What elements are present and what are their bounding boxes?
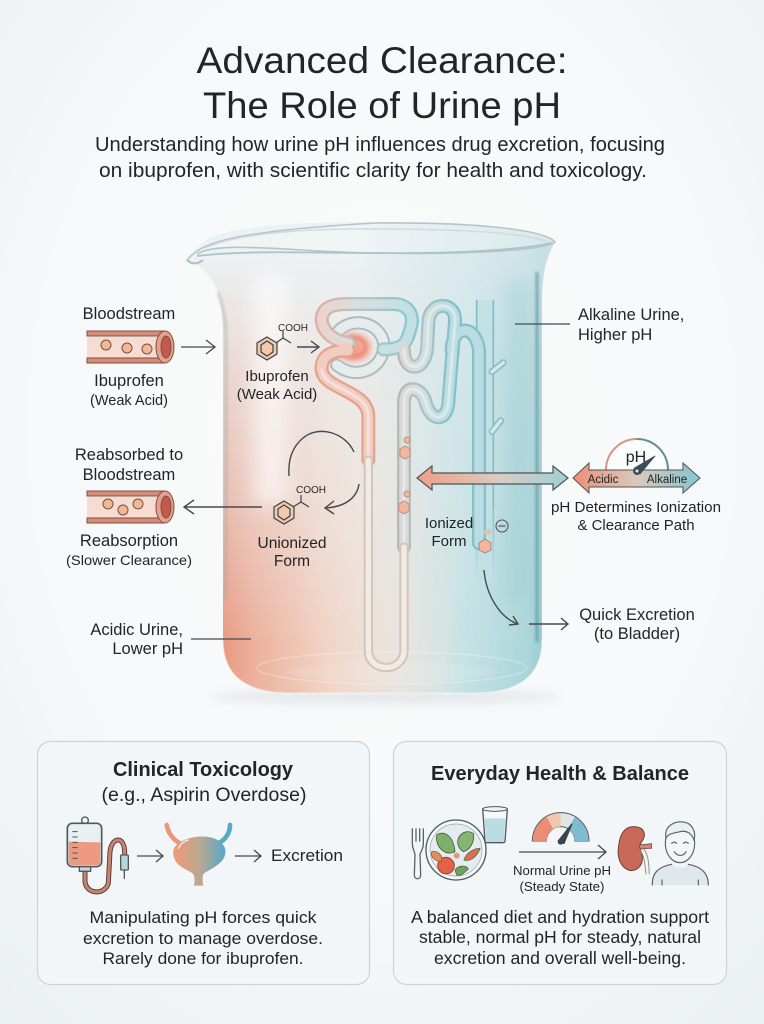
- label: acidic urine: Acidic Urine,: [90, 621, 183, 639]
- label: alkaline urine: Higher pH: [578, 326, 652, 344]
- collecting duct: [477, 300, 503, 583]
- body text: Manipulating pH forces quick: [90, 908, 317, 927]
- body text: [83, 908, 323, 968]
- arrow: to reabsorption: [184, 500, 262, 514]
- title: The Role of Urine pH: [203, 85, 561, 126]
- icon: smiling person: [652, 822, 708, 885]
- label: ibuprofen: Ibuprofen: [94, 372, 164, 390]
- label: acidic urine: Lower pH: [112, 640, 183, 658]
- label: unionized form: Unionized: [258, 535, 326, 552]
- body text: excretion and overall well-being.: [434, 948, 686, 968]
- arrow: bladder to excretion: [235, 850, 261, 862]
- icon: bladder: [167, 825, 230, 886]
- label: pH determines ionization: & Clearance Path: [578, 517, 694, 534]
- arrow: bloodstream to beaker: [181, 340, 215, 354]
- body text: [411, 907, 709, 968]
- icon: blood vessel reabsorption: [87, 491, 174, 523]
- pH gauge arrow: Alkaline: [647, 474, 687, 486]
- ionized particle: [479, 520, 508, 553]
- label: ibuprofen inside beaker: [237, 368, 317, 403]
- unionized molecule: COOH: [296, 485, 326, 496]
- reabsorption vessel group: Bloodstream: [83, 466, 175, 484]
- pH gauge arrow: pH: [626, 449, 646, 466]
- label: unionized form: [258, 535, 326, 570]
- icon: kidney: [618, 827, 652, 874]
- body text: A balanced diet and hydration support: [411, 907, 709, 927]
- label: pH determines ionization: pH Determines Ionization: [551, 499, 721, 516]
- label: quick excretion: Quick Excretion: [579, 606, 695, 624]
- arrow: quick excretion: [529, 618, 568, 630]
- arrow: molecule to glomerulus: [297, 341, 319, 353]
- label: quick excretion: (to Bladder): [594, 625, 680, 643]
- reabsorption vessel group: [66, 446, 192, 568]
- label: ionized form: Ionized: [425, 515, 473, 532]
- subtitle: on ibuprofen, with scientific clarity for health and toxicology.: [99, 160, 647, 182]
- ibuprofen molecule top: [257, 323, 308, 360]
- heading: Clinical Toxicology: [113, 759, 294, 781]
- loop of Henle: [368, 460, 404, 667]
- ibuprofen molecule top: COOH: [278, 323, 308, 334]
- glomerulus: [331, 323, 384, 372]
- panel: clinical toxicology: [38, 742, 370, 984]
- label: normal urine pH: [513, 863, 611, 894]
- icon: plate of food: [426, 820, 486, 880]
- bloodstream vessel group: (Weak Acid): [90, 393, 168, 409]
- circular arrows: [289, 431, 359, 514]
- label: ionized form: Form: [432, 533, 466, 550]
- panel: everyday health: [394, 742, 726, 984]
- label: ibuprofen inside beaker: Ibuprofen: [245, 368, 309, 385]
- title: [196, 40, 568, 126]
- icon: normal pH gauge: [532, 813, 589, 845]
- curved arrow to bladder: [484, 570, 518, 625]
- title: Advanced Clearance:: [196, 40, 568, 81]
- heading: Everyday Health & Balance: [431, 763, 689, 785]
- unionized molecule: [274, 485, 326, 524]
- label: ionized form: [425, 515, 473, 550]
- label: alkaline urine: Alkaline Urine,: [578, 306, 684, 324]
- label: ibuprofen inside beaker: (Weak Acid): [237, 386, 317, 403]
- reabsorption vessel group: (Slower Clearance): [66, 552, 192, 568]
- arrow: diet to kidney: [519, 845, 606, 859]
- subtitle: Understanding how urine pH influences drug excretion, focusing: [95, 134, 665, 156]
- icon: glass of water: [483, 807, 507, 843]
- icon: IV bag: [67, 817, 128, 892]
- label: reabsorption: Reabsorption: [80, 532, 178, 550]
- kidney nephron tubes: [322, 300, 503, 667]
- label: acidic urine: [90, 621, 251, 658]
- label: normal urine pH: Normal Urine pH: [513, 863, 611, 878]
- label: excretion: Excretion: [271, 846, 343, 865]
- arrow: IV to bladder: [137, 850, 163, 862]
- drug particles in tubule: [399, 437, 410, 514]
- label: unionized form: Form: [274, 553, 310, 570]
- renal tubule inner stroke: [322, 304, 479, 547]
- bloodstream vessel group: [83, 305, 175, 409]
- body text: excretion to manage overdose.: [83, 929, 323, 948]
- label: quick excretion: [579, 606, 695, 643]
- label: alkaline urine: [515, 306, 684, 344]
- double arrow: [417, 466, 568, 490]
- body text: stable, normal pH for steady, natural: [419, 927, 701, 947]
- label: pH determines ionization: [551, 499, 721, 534]
- label: reabsorbed to bloodstream: Reabsorbed to: [75, 446, 183, 464]
- subtitle: [95, 134, 665, 182]
- label: normal urine pH: (Steady State): [520, 879, 604, 894]
- label: bloodstream: Bloodstream: [83, 305, 175, 323]
- pH gauge arrow: Acidic: [588, 474, 619, 486]
- subheading: (e.g., Aspirin Overdose): [102, 785, 306, 806]
- glass beaker: [187, 222, 560, 704]
- renal tubule outer stroke: [322, 304, 412, 349]
- pH gauge arrow: [573, 439, 700, 493]
- body text: Rarely done for ibuprofen.: [102, 949, 304, 968]
- icon: blood vessel with ibuprofen: [87, 331, 174, 363]
- icon: fork: [412, 828, 423, 879]
